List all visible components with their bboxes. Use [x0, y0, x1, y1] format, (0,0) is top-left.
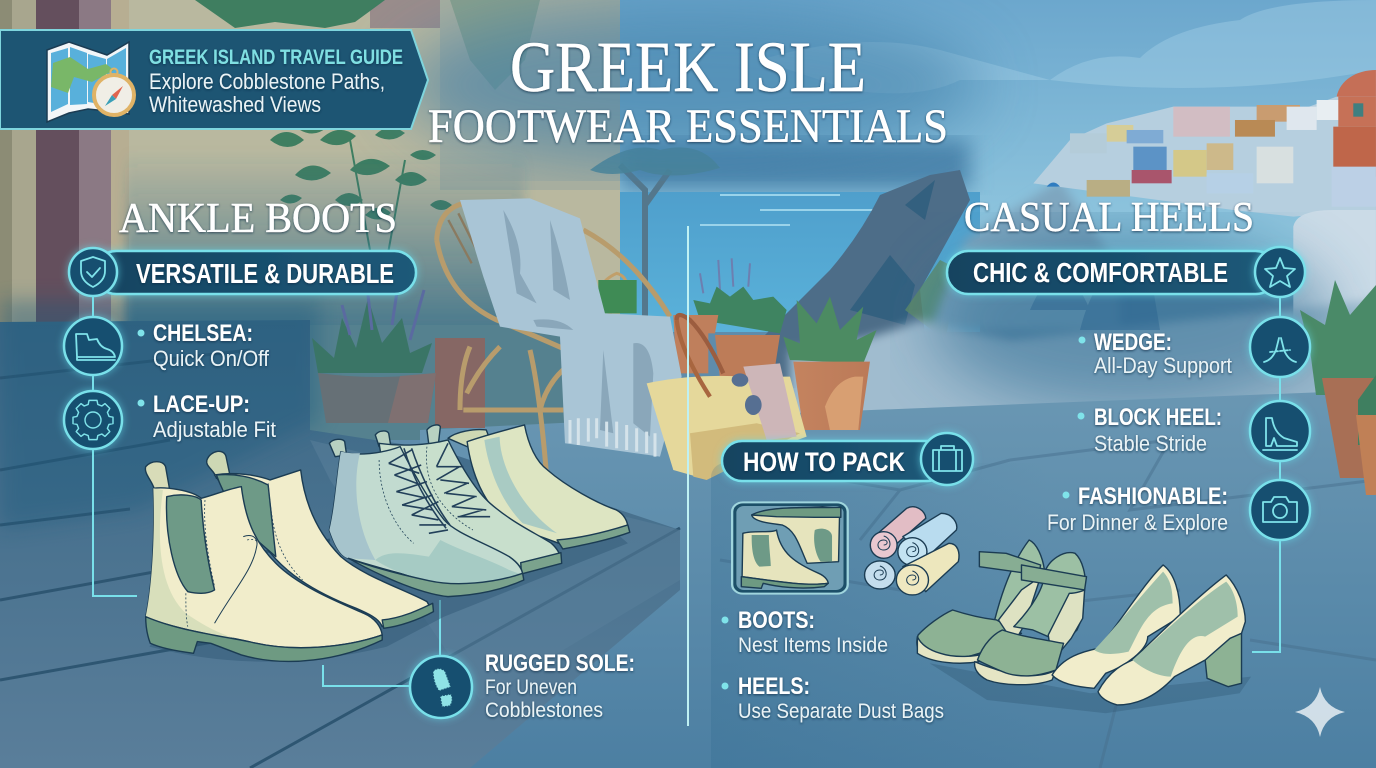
- icon: shoe sole: [433, 668, 452, 707]
- feature: block heel: BLOCK HEEL:: [1094, 404, 1222, 431]
- blue title wash: [400, 5, 980, 165]
- icon: block heel: [1263, 418, 1297, 450]
- tip: heels: Use Separate Dust Bags: [738, 700, 944, 723]
- feature: wedge: WEDGE:: [1094, 329, 1172, 356]
- heading: casual heels: CASUAL HEELS: [964, 195, 1254, 241]
- left potted plants: [312, 285, 485, 428]
- icon: suitcase: [933, 446, 962, 471]
- banner: travel guide: Whitewashed Views: [149, 92, 321, 117]
- clouds: [760, 0, 1376, 93]
- title: [428, 27, 948, 153]
- feature: chelsea: [64, 317, 270, 375]
- ankle boots illustration: [145, 425, 630, 662]
- feature: chelsea: Quick On/Off: [153, 346, 270, 371]
- lavender: [700, 258, 750, 293]
- icon: map and compass: [47, 42, 134, 122]
- left vignette: [0, 300, 320, 530]
- pill: versatile and durable: VERSATILE & DURABLE: [136, 258, 394, 289]
- tip: boots: Nest Items Inside: [738, 634, 888, 657]
- chair, blanket, bag and potted plants: [437, 198, 877, 480]
- pill: chic and comfortable: [947, 247, 1305, 297]
- banner: travel guide: Explore Cobblestone Paths,: [149, 69, 385, 94]
- fade on lower wall: [125, 150, 525, 340]
- feature: rugged sole: Cobblestones: [485, 699, 603, 722]
- pill: versatile and durable: [69, 248, 416, 296]
- heels wash: [930, 230, 1330, 410]
- title: FOOTWEAR ESSENTIALS: [428, 100, 948, 153]
- feature: lace-up: [64, 391, 276, 449]
- hillside: [930, 180, 1120, 330]
- feature: block heel: Stable Stride: [1094, 431, 1207, 456]
- feature: rugged sole: For Uneven: [485, 676, 577, 699]
- tip: boots: [722, 607, 888, 657]
- tip: boots: BOOTS:: [738, 607, 815, 634]
- ground shadow: [150, 530, 628, 662]
- tip: heels: HEELS:: [738, 673, 810, 700]
- heading: ankle boots: ANKLE BOOTS: [119, 196, 397, 242]
- heels illustration: [917, 540, 1251, 713]
- tree: [620, 165, 670, 330]
- feature: fashionable: For Dinner & Explore: [1047, 510, 1228, 535]
- rolled towels: [865, 507, 959, 595]
- back wall shade behind chair: [300, 325, 630, 440]
- icon: wedge arch: [1264, 338, 1296, 362]
- icon: gear: [73, 400, 113, 440]
- title: GREEK ISLE: [510, 27, 866, 107]
- back chelsea boot: [207, 451, 433, 628]
- village: [1033, 70, 1376, 350]
- icon: shield: [81, 257, 105, 287]
- second boot: [375, 425, 562, 574]
- front pot: [783, 297, 877, 363]
- icon: chelsea boot: [76, 334, 115, 360]
- cliff: [760, 170, 970, 390]
- back pump: [1052, 565, 1180, 688]
- connector lines: [93, 296, 1280, 686]
- front chelsea boot: [145, 462, 382, 661]
- feature: lace-up: Adjustable Fit: [153, 417, 276, 442]
- banner: travel guide: [0, 30, 428, 129]
- panel: how to pack: HOW TO PACK: [743, 447, 905, 477]
- bag: [647, 376, 807, 477]
- feature: block heel: [1078, 401, 1310, 461]
- steps: [0, 320, 680, 768]
- feature: fashionable: FASHIONABLE:: [1078, 483, 1228, 510]
- right potted plant: [1300, 280, 1376, 495]
- floor: [420, 390, 1376, 768]
- ground shadow: [930, 663, 1251, 713]
- feature: wedge: [1078, 317, 1310, 378]
- feature: rugged sole: RUGGED SOLE:: [485, 650, 635, 677]
- pots back: [693, 287, 787, 333]
- wall: [0, 0, 620, 340]
- icon: camera: [1263, 497, 1297, 522]
- pill: chic and comfortable: CHIC & COMFORTABLE: [973, 257, 1228, 288]
- panel: how to pack: [722, 433, 973, 595]
- front pump: [1098, 575, 1245, 705]
- icon: sparkle watermark: [1295, 687, 1345, 737]
- back wedge: [917, 540, 1044, 663]
- foliage: [195, 0, 540, 270]
- feature: rugged sole: [410, 650, 635, 722]
- front wedge: [975, 553, 1087, 685]
- blanket: [460, 198, 682, 457]
- icon: star: [1265, 258, 1295, 287]
- feature: lace-up: LACE-UP:: [153, 391, 250, 418]
- feature: chelsea: CHELSEA:: [153, 320, 253, 347]
- chair: [437, 203, 670, 477]
- front lace boot: [329, 439, 524, 597]
- central divider line: [687, 226, 689, 726]
- feature: fashionable: [1047, 480, 1310, 540]
- feature: wedge: All-Day Support: [1094, 353, 1232, 378]
- tip: heels: [722, 673, 944, 723]
- banner: travel guide: GREEK ISLAND TRAVEL GUIDE: [149, 46, 403, 69]
- packing cube: [732, 502, 848, 594]
- panel background: how to pack: [711, 463, 1051, 768]
- third boot: [448, 425, 630, 549]
- terrace: [790, 300, 1376, 490]
- distant land and sea: [620, 140, 970, 190]
